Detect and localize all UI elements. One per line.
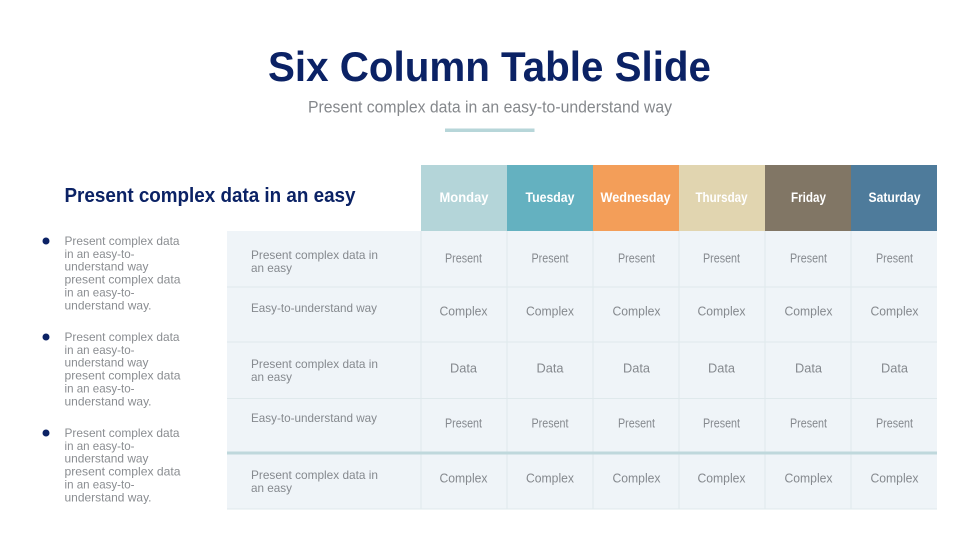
bullet item 3: present complex data xyxy=(64,465,181,479)
bullet item 2 xyxy=(42,330,181,408)
table body background xyxy=(227,231,937,509)
bullet item 1: in an easy-to- xyxy=(64,247,135,261)
bullet item 3: understand way. xyxy=(64,490,152,504)
bullet item 3: Present complex data xyxy=(64,426,180,440)
section heading: Present complex data in an easy xyxy=(64,185,356,207)
row 3: Data xyxy=(881,362,908,376)
row 5: an easy xyxy=(251,481,292,495)
bullet item 1: understand way. xyxy=(64,298,152,312)
title underline accent xyxy=(445,128,534,132)
row 5: Complex xyxy=(870,472,919,486)
row 4: Present xyxy=(532,416,569,430)
bullet item 1: Present complex data xyxy=(64,234,180,248)
row 1: Present xyxy=(445,252,482,266)
row 2: Complex xyxy=(612,304,661,318)
row 2: Easy-to-understand way xyxy=(251,301,377,315)
bullet item 1 xyxy=(42,234,181,312)
header: Friday xyxy=(765,165,851,231)
row 2 xyxy=(251,301,919,318)
row 1: Present complex data in xyxy=(251,248,378,262)
row 2: Complex xyxy=(784,304,833,318)
row 4: Easy-to-understand way xyxy=(251,411,377,425)
row 2: Complex xyxy=(698,304,746,318)
row 4: Present xyxy=(445,416,482,430)
bullet item 1: understand way xyxy=(64,260,148,274)
row 1: Present xyxy=(703,252,740,266)
header: Tuesday xyxy=(507,165,593,231)
header: Thursday xyxy=(679,165,765,231)
header: Wednesday: Wednesday xyxy=(600,190,671,205)
header: Tuesday: Tuesday xyxy=(526,190,575,205)
bullet item 3: in an easy-to- xyxy=(64,439,135,453)
row 1: an easy xyxy=(251,261,292,275)
bullet item 3: in an easy-to- xyxy=(64,478,135,492)
row 1: Present xyxy=(876,252,913,266)
table xyxy=(227,165,937,510)
bullet item 1: in an easy-to- xyxy=(64,286,135,300)
row 3: Data xyxy=(795,362,822,376)
row 2: Complex xyxy=(440,304,488,318)
header: Monday xyxy=(421,165,507,231)
row 2: Complex xyxy=(870,304,919,318)
bullet list xyxy=(42,234,181,504)
bullet item 2: in an easy-to- xyxy=(64,343,135,357)
row 3: an easy xyxy=(251,370,292,384)
bullet item 2: in an easy-to- xyxy=(64,382,135,396)
row 5: Complex xyxy=(698,472,746,486)
row 3: Data xyxy=(708,362,735,376)
row 1 xyxy=(251,248,913,275)
row 3: Present complex data in xyxy=(251,357,378,371)
row 3 xyxy=(251,357,908,384)
row 1: Present xyxy=(618,252,655,266)
row 5 xyxy=(251,468,919,495)
row 1: Present xyxy=(532,252,569,266)
row 2: Complex xyxy=(526,304,575,318)
row 5: Complex xyxy=(612,472,661,486)
bullet item 3 xyxy=(42,426,181,504)
header: Saturday xyxy=(851,165,937,231)
row 1: Present xyxy=(790,252,827,266)
header: Saturday: Saturday xyxy=(868,190,921,205)
title: Six Column Table Slide xyxy=(268,43,711,90)
bullet item 2: understand way xyxy=(64,356,148,370)
header: Thursday: Thursday xyxy=(696,190,748,205)
row 3: Data xyxy=(623,362,650,376)
bullet item 2: understand way. xyxy=(64,394,152,408)
row 3: Data xyxy=(536,362,564,376)
row 5: Complex xyxy=(440,472,488,486)
row 5: Complex xyxy=(784,472,833,486)
row 3: Data xyxy=(450,362,477,376)
bullet item 2: Present complex data xyxy=(64,330,180,344)
row 5: Present complex data in xyxy=(251,468,378,482)
row 4: Present xyxy=(876,416,913,430)
header: Monday: Monday xyxy=(440,190,489,205)
header: Wednesday xyxy=(593,165,679,231)
row 4: Present xyxy=(703,416,740,430)
row 5: Complex xyxy=(526,472,575,486)
row 4: Present xyxy=(618,416,655,430)
bullet item 1: present complex data xyxy=(64,273,181,287)
header: Friday: Friday xyxy=(791,190,826,205)
bullet item 3: understand way xyxy=(64,452,148,466)
subtitle: Present complex data in an easy-to-understand way xyxy=(308,98,673,116)
row 4 xyxy=(251,411,913,430)
bullet item 2: present complex data xyxy=(64,369,181,383)
row 4: Present xyxy=(790,416,827,430)
